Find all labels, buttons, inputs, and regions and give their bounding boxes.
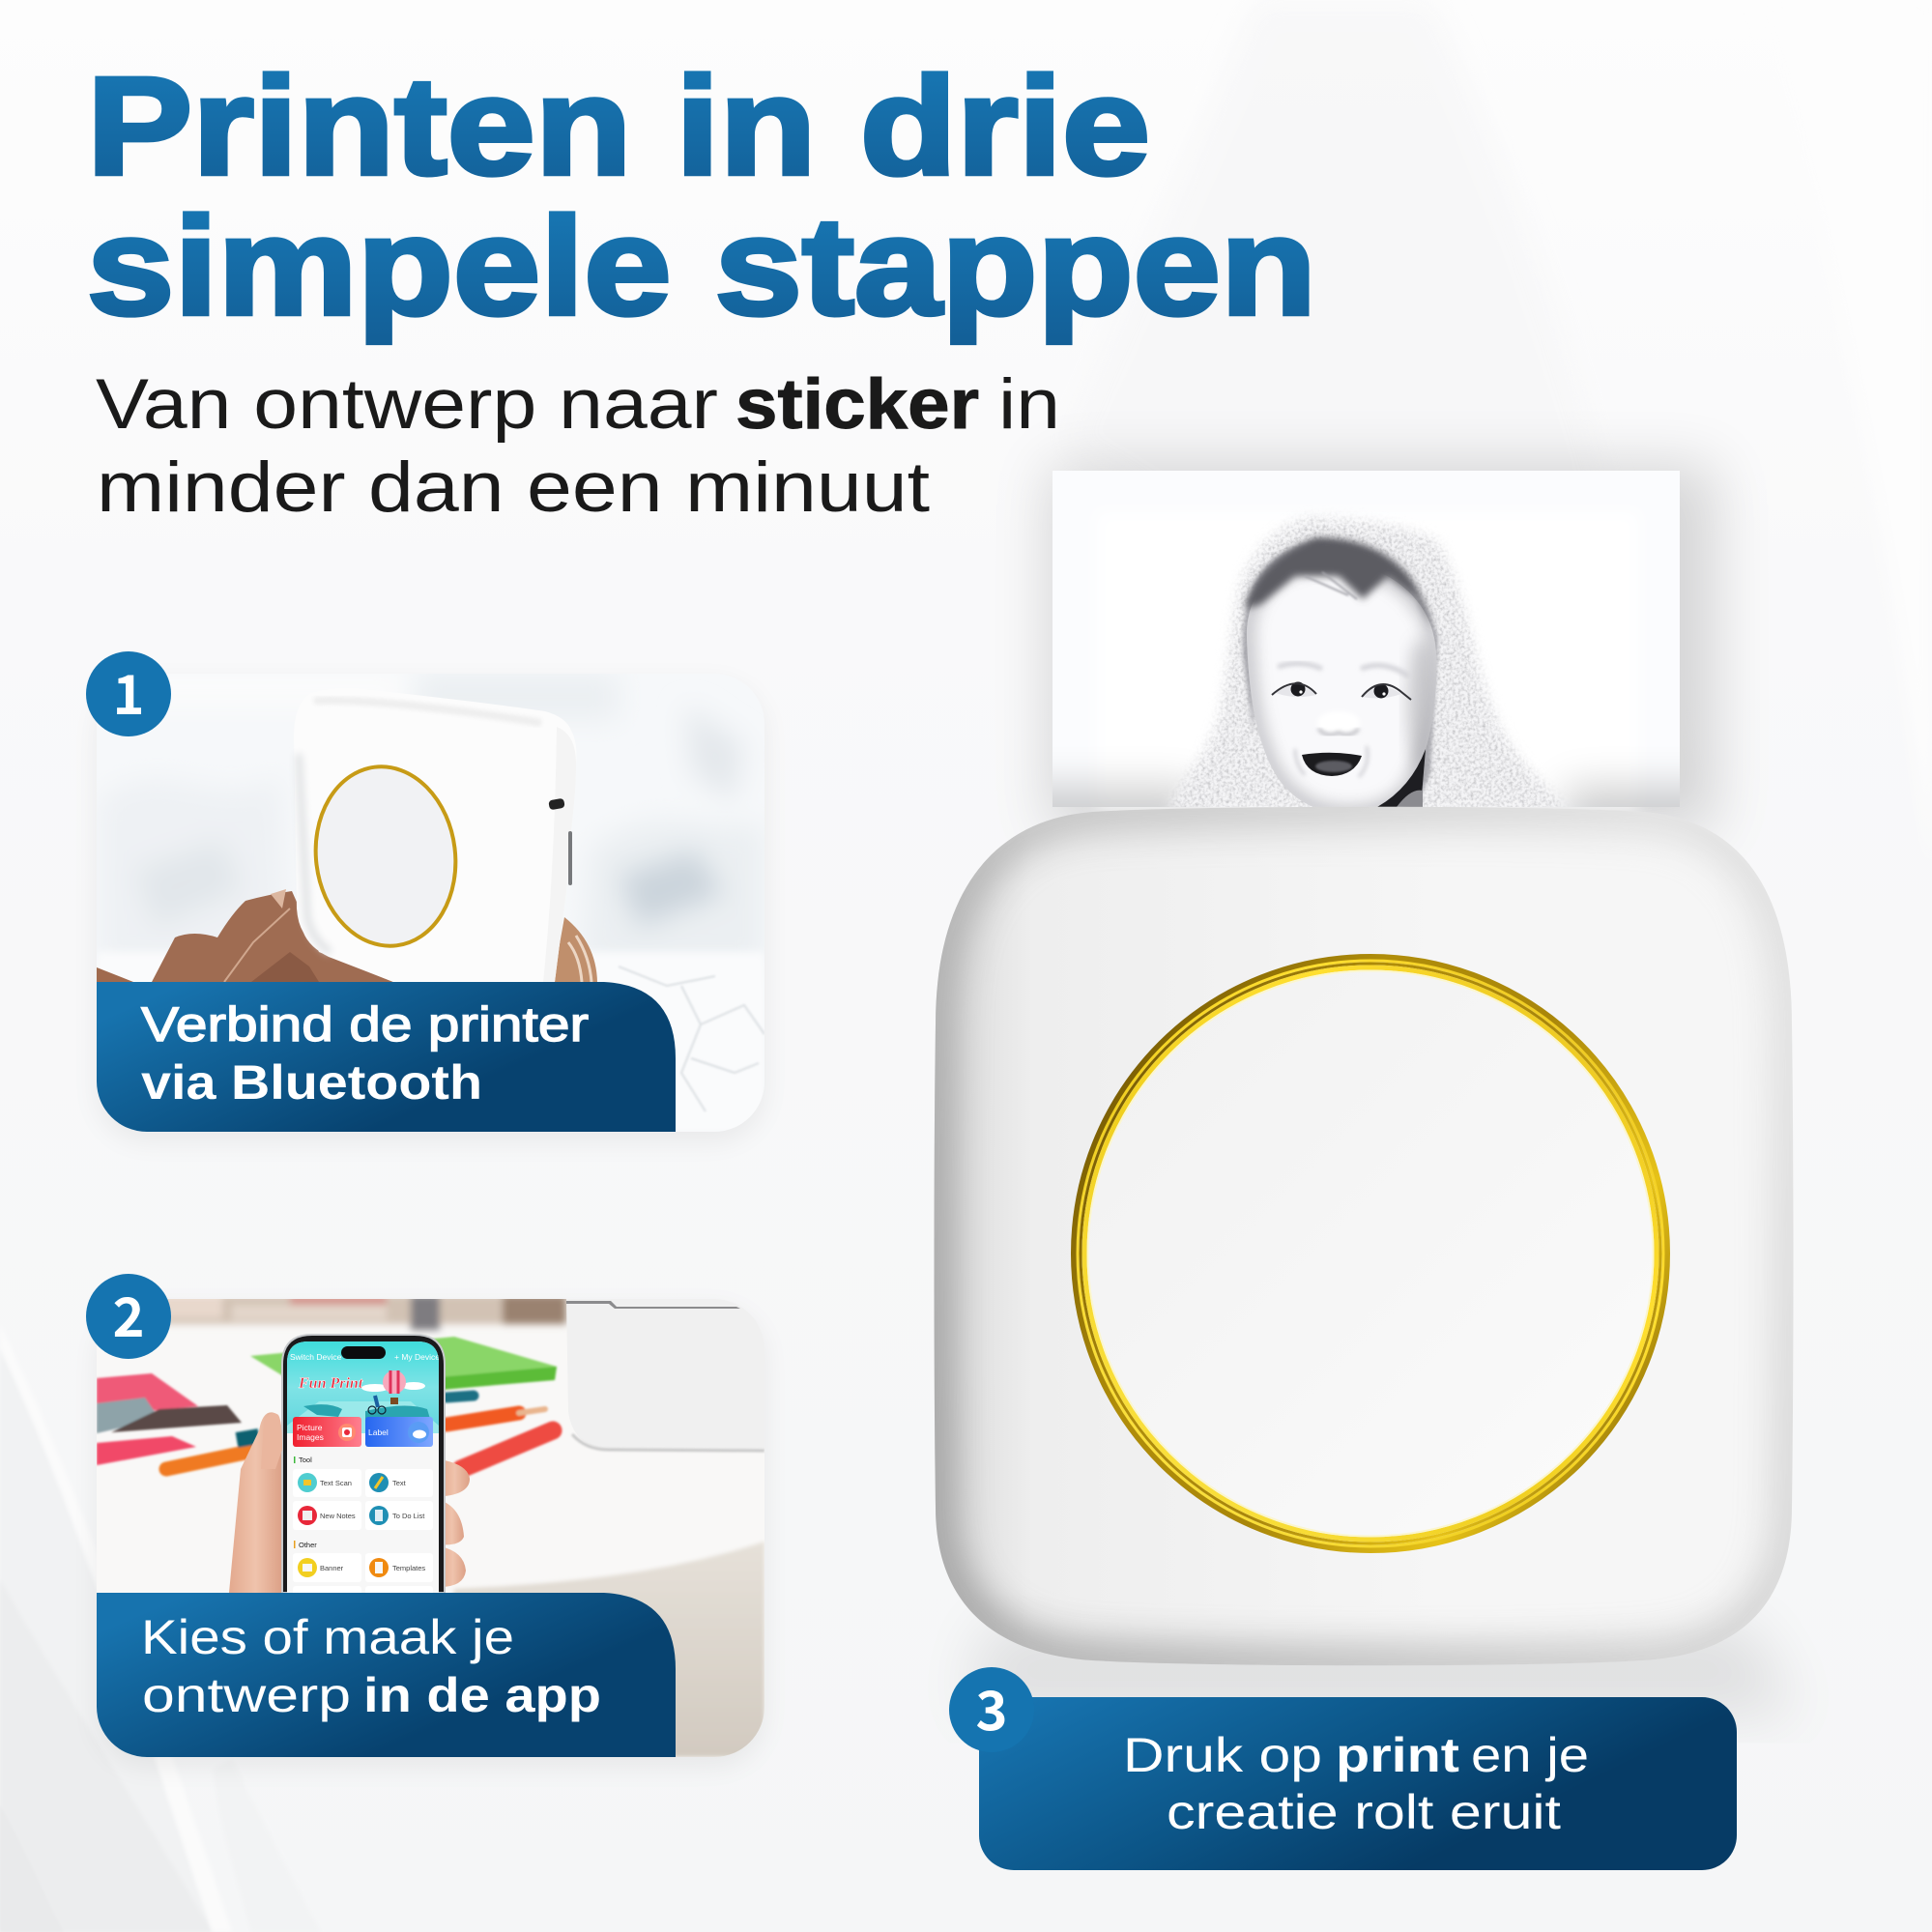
smile creases: [1295, 746, 1368, 777]
step 1 card: [97, 674, 764, 1141]
usb port: [548, 798, 565, 810]
status row: Switch Device: [290, 1352, 342, 1362]
step 3 label: print: [1336, 1728, 1459, 1782]
mini printer ring: [313, 764, 458, 948]
pens: [166, 1396, 553, 1469]
face: [1227, 541, 1450, 822]
step 2 number badge: [86, 1274, 171, 1359]
subtitle: in: [998, 365, 1060, 444]
balloon: [361, 1370, 425, 1404]
step 2 label: Kies of maak je: [141, 1610, 514, 1664]
step 2 banner: [97, 1593, 676, 1757]
beige floor: [425, 1542, 764, 1757]
other section: [293, 1541, 433, 1596]
papers: [97, 1373, 242, 1465]
printer body: [928, 797, 1798, 1672]
tool section: Text Scan: [320, 1479, 352, 1487]
hood inner shadow: [1243, 541, 1438, 807]
label button: Label: [368, 1427, 389, 1437]
tool section: New Notes: [320, 1512, 356, 1520]
subtitle: [96, 365, 1060, 527]
step 2 number badge: 2: [112, 1275, 145, 1353]
towel hood: [1168, 518, 1568, 812]
app logo: Fun Print: [298, 1375, 363, 1392]
step 1 number badge: 1: [112, 652, 145, 731]
subtitle: minder dan een minuut: [97, 448, 930, 527]
baby portrait: [1168, 518, 1568, 822]
step 3 label: creatie rolt eruit: [1167, 1785, 1561, 1839]
other section: Other: [299, 1541, 317, 1549]
title: Printen in drie: [87, 48, 1150, 204]
eyes: [1272, 682, 1411, 700]
wood slice: [553, 917, 597, 982]
phone: [282, 1335, 445, 1596]
title: simpele stappen: [87, 188, 1316, 344]
side button: [568, 831, 572, 885]
tool section: [293, 1456, 433, 1530]
tool section: Tool: [299, 1456, 312, 1464]
title: [87, 48, 1316, 344]
dried leaf: [97, 889, 393, 982]
green notebook: [250, 1337, 557, 1390]
step 3 number badge: [949, 1667, 1034, 1752]
eyebrows: [1278, 663, 1409, 677]
step 3 number badge: 3: [975, 1668, 1008, 1746]
printer shadow on the paper corners: [1005, 788, 1730, 846]
step 2 card: [97, 1295, 764, 1767]
hand: [229, 1412, 470, 1593]
step 3 banner: [979, 1697, 1737, 1870]
gold ring: [1074, 957, 1667, 1550]
picture images button: [293, 1417, 361, 1447]
printed paper with baby photo: [1005, 464, 1730, 846]
step 1 number badge: [86, 651, 171, 736]
step 1 banner: [97, 982, 676, 1132]
background printer: [566, 1299, 764, 1451]
thumb over phone edge: [261, 1413, 282, 1469]
printer disc: [1088, 971, 1653, 1536]
picture images button: Images: [297, 1432, 324, 1442]
other section: Templates: [392, 1564, 425, 1572]
step 2 label: in de app: [363, 1668, 601, 1722]
mini printer: [294, 688, 576, 982]
step 1 photo: printer on a leaf on marble: [97, 674, 764, 1132]
step 2 photo: phone in hand on desk: [97, 1295, 764, 1757]
picture images button: Picture: [297, 1423, 323, 1432]
cyclist: [368, 1396, 386, 1414]
mouth: [1302, 753, 1362, 776]
phone screen: [287, 1341, 440, 1596]
map: [303, 1404, 430, 1419]
printer shadow: [966, 1624, 1798, 1716]
main printer: [928, 797, 1798, 1716]
step 2 label: ontwerp: [142, 1668, 351, 1722]
step 3 label: Druk op: [1123, 1728, 1322, 1782]
step 1 label: via Bluetooth: [141, 1055, 482, 1110]
status row: [290, 1352, 440, 1362]
step 3 label: en je: [1471, 1728, 1589, 1782]
other section: Banner: [320, 1564, 344, 1572]
step 3 label: [1123, 1728, 1589, 1839]
step 1 label: [141, 997, 589, 1110]
subtitle: Van ontwerp naar: [96, 365, 718, 444]
subtitle: sticker: [735, 365, 979, 444]
label button: [365, 1417, 433, 1447]
tool section: To Do List: [392, 1512, 425, 1520]
step 2 label: [141, 1610, 601, 1722]
step 1 label: Verbind de printer: [141, 997, 589, 1052]
tool section: Text: [392, 1479, 407, 1487]
nose: [1317, 711, 1360, 735]
neck shadow: [1377, 749, 1426, 807]
hair: [1245, 537, 1432, 628]
status row: + My Device: [394, 1352, 440, 1362]
